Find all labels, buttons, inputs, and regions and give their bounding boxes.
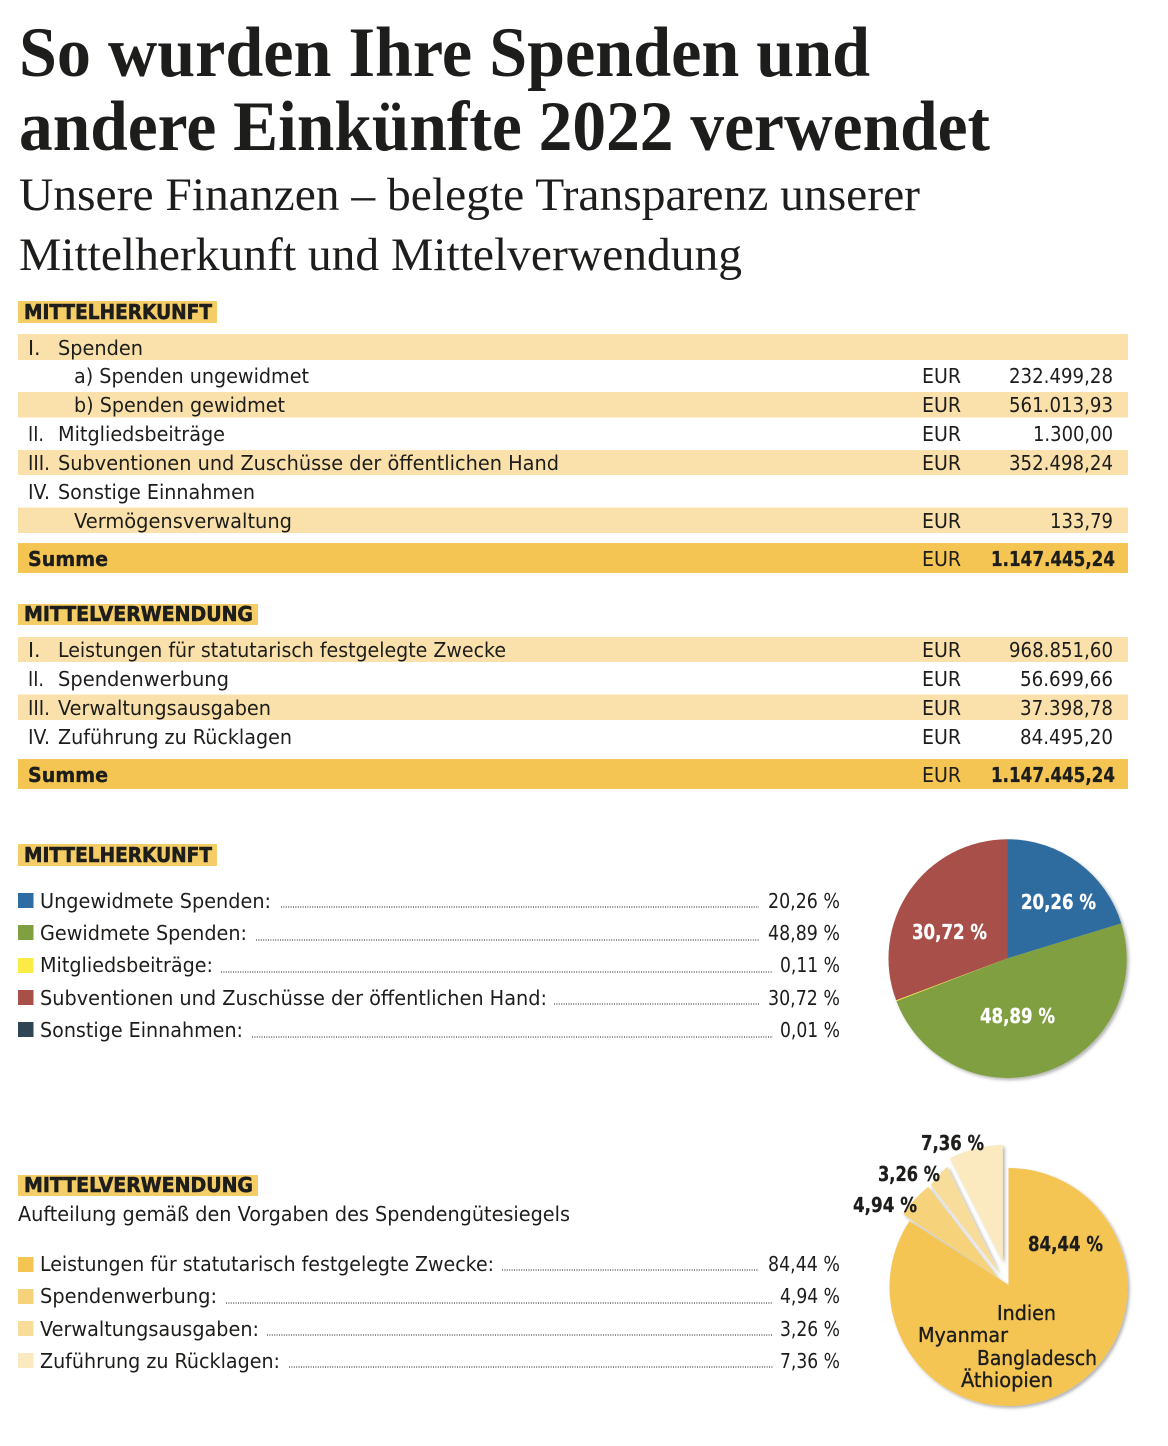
legend: Spendenwerbung: Spendenwerbung: [40,1284,217,1308]
row: Spenden: I. [28,336,41,360]
legend: Ungewidmete Spenden: 20,26 % [768,889,840,913]
row: Leistungen: 968.851,60 [1009,638,1113,662]
row: Leistungen [18,637,1128,662]
row: Summe [18,543,1128,573]
panel: Mittelherkunft legend [18,843,840,1042]
row: Mitgliedsbeiträge: 1.300,00 [1033,422,1113,446]
row: Subventionen: EUR [922,451,961,475]
row: Spenden gewidmet: 561.013,93 [1009,393,1113,417]
row: Summe [18,759,1128,789]
row: Spendenwerbung: 56.699,66 [1020,667,1113,691]
legend: Mitgliedsbeiträge: 0,11 % [780,953,840,977]
legend: Leistungen: 84,44 % [768,1252,840,1276]
subtitle [19,169,920,281]
row: Summe: 1.147.445,24 [991,547,1115,571]
row: Sonstige Einnahmen: IV. [28,480,50,504]
row: Vermögensverwaltung: 133,79 [1050,509,1113,533]
row: Zuführung zu Rücklagen: Zuführung zu Rücklagen [58,725,292,749]
legend: Spendenwerbung: 4,94 % [780,1284,840,1308]
label: 3,26 %: 3,26 % [878,1162,940,1186]
label: 30,72 %: 30,72 % [912,920,987,944]
legend: Mitgliedsbeiträge: Mitgliedsbeiträge: [40,953,213,977]
legend: Leistungen [18,1252,840,1276]
legend: Verwaltungsausgaben [18,1317,840,1341]
row: Verwaltungsausgaben [18,694,1128,720]
row: Spenden ungewidmet: EUR [922,364,961,388]
row: Zuführung zu Rücklagen: EUR [922,725,961,749]
heading: Mittelherkunft: MITTELHERKUNFT [24,300,212,324]
row: Spenden [18,334,1128,360]
legend: Subventionen: 30,72 % [768,986,840,1010]
row: Spendenwerbung: II. [28,667,44,691]
legend: Zuführung zu Rücklagen: Zuführung zu Rücklagen: [40,1349,280,1373]
row: Mitgliedsbeiträge: Mitgliedsbeiträge [58,422,225,446]
text: Aufteilung: Aufteilung gemäß den Vorgaben des Spendengütesiegels [18,1202,570,1226]
row: Subventionen: III. [28,451,50,475]
label: 84,44 %: 84,44 % [1028,1232,1103,1256]
legend: Sonstige Einnahmen [18,1018,840,1042]
row: Spenden ungewidmet: a) Spenden ungewidmet [74,364,309,388]
legend: Spendenwerbung [18,1284,840,1308]
row: Zuführung zu Rücklagen [28,725,1113,749]
panel: Mittelverwendung legend [18,1173,840,1373]
row: Subventionen: 352.498,24 [1009,451,1113,475]
label: 20,26 %: 20,26 % [1021,890,1096,914]
row: Spenden ungewidmet [74,364,1113,388]
label: Myanmar: Myanmar [918,1323,1009,1347]
row: Summe: EUR [922,547,961,571]
legend: Sonstige Einnahmen: 0,01 % [780,1018,840,1042]
row: Mitgliedsbeiträge [28,422,1113,446]
row: Subventionen [18,450,1128,475]
row: Leistungen: Leistungen für statutarisch festgelegte Zwecke [58,638,506,662]
row: Mitgliedsbeiträge: EUR [922,422,961,446]
row: Verwaltungsausgaben: 37.398,78 [1020,696,1113,720]
legend: Subventionen: Subventionen und Zuschüsse der öffentlichen Hand: [40,986,547,1010]
label: Indien: Indien [997,1301,1056,1325]
row: Zuführung zu Rücklagen: IV. [28,725,50,749]
row: Subventionen: Subventionen und Zuschüsse der öffentlichen Hand [58,451,559,475]
title: andere Einkünfte 2022 verwendet [19,88,990,166]
legend: Verwaltungsausgaben: Verwaltungsausgaben: [40,1317,259,1341]
row: Spenden gewidmet: b) Spenden gewidmet [74,393,285,417]
pie chart: Mittelverwendung [853,1131,1128,1406]
heading: Mittelverwendung: MITTELVERWENDUNG [24,1173,253,1197]
row: Spenden gewidmet [18,392,1128,418]
legend: Gewidmete Spenden: 48,89 % [768,921,840,945]
legend: Sonstige Einnahmen: Sonstige Einnahmen: [40,1018,243,1042]
row: Verwaltungsausgaben: Verwaltungsausgaben [58,696,271,720]
legend: Subventionen [18,986,840,1010]
subtitle: Mittelherkunft und Mittelverwendung [19,229,742,281]
label: 4,94 %: 4,94 % [853,1193,917,1217]
legend: Ungewidmete Spenden [18,889,840,913]
row: Leistungen: I. [28,638,41,662]
row: Mitgliedsbeiträge: II. [28,422,44,446]
heading: Mittelherkunft: MITTELHERKUNFT [24,843,212,867]
label: Äthiopien: Äthiopien [961,1368,1053,1392]
row: Vermögensverwaltung: Vermögensverwaltung [74,509,292,533]
row: Vermögensverwaltung [18,508,1128,533]
pie chart: Mittelherkunft [888,839,1127,1078]
legend: Verwaltungsausgaben: 3,26 % [780,1317,840,1341]
row: Spendenwerbung [28,667,1113,691]
row: Zuführung zu Rücklagen: 84.495,20 [1020,725,1113,749]
row: Verwaltungsausgaben: EUR [922,696,961,720]
row: Verwaltungsausgaben: III. [28,696,50,720]
label: 7,36 %: 7,36 % [921,1131,984,1155]
legend: Gewidmete Spenden: Gewidmete Spenden: [40,921,247,945]
panel: Mittelverwendung table [18,602,1128,789]
row: Sonstige Einnahmen: Sonstige Einnahmen [58,480,255,504]
legend: Gewidmete Spenden [18,921,840,945]
subtitle: Unsere Finanzen – belegte Transparenz unserer [19,169,920,221]
panel: Mittelherkunft table [18,300,1128,573]
row: Spendenwerbung: EUR [922,667,961,691]
row: Leistungen: EUR [922,638,961,662]
row: Spenden gewidmet: EUR [922,393,961,417]
row: Summe: Summe [28,763,108,787]
legend: Mitgliedsbeiträge [18,953,840,977]
title [19,14,990,166]
legend: Leistungen: Leistungen für statutarisch festgelegte Zwecke: [40,1252,494,1276]
row: Summe: 1.147.445,24 [991,763,1115,787]
legend: Zuführung zu Rücklagen: 7,36 % [780,1349,840,1373]
row: Spenden ungewidmet: 232.499,28 [1009,364,1113,388]
legend: Ungewidmete Spenden: Ungewidmete Spenden: [40,889,271,913]
title: So wurden Ihre Spenden und [19,14,870,92]
row: Spendenwerbung: Spendenwerbung [58,667,229,691]
row: Spenden: Spenden [58,336,143,360]
row: Vermögensverwaltung: EUR [922,509,961,533]
row: Summe: Summe [28,547,108,571]
legend: Zuführung zu Rücklagen [18,1349,840,1373]
label: Bangladesch: Bangladesch [977,1346,1097,1370]
row: Summe: EUR [922,763,961,787]
label: 48,89 %: 48,89 % [980,1004,1055,1028]
heading: Mittelverwendung: MITTELVERWENDUNG [24,602,253,626]
